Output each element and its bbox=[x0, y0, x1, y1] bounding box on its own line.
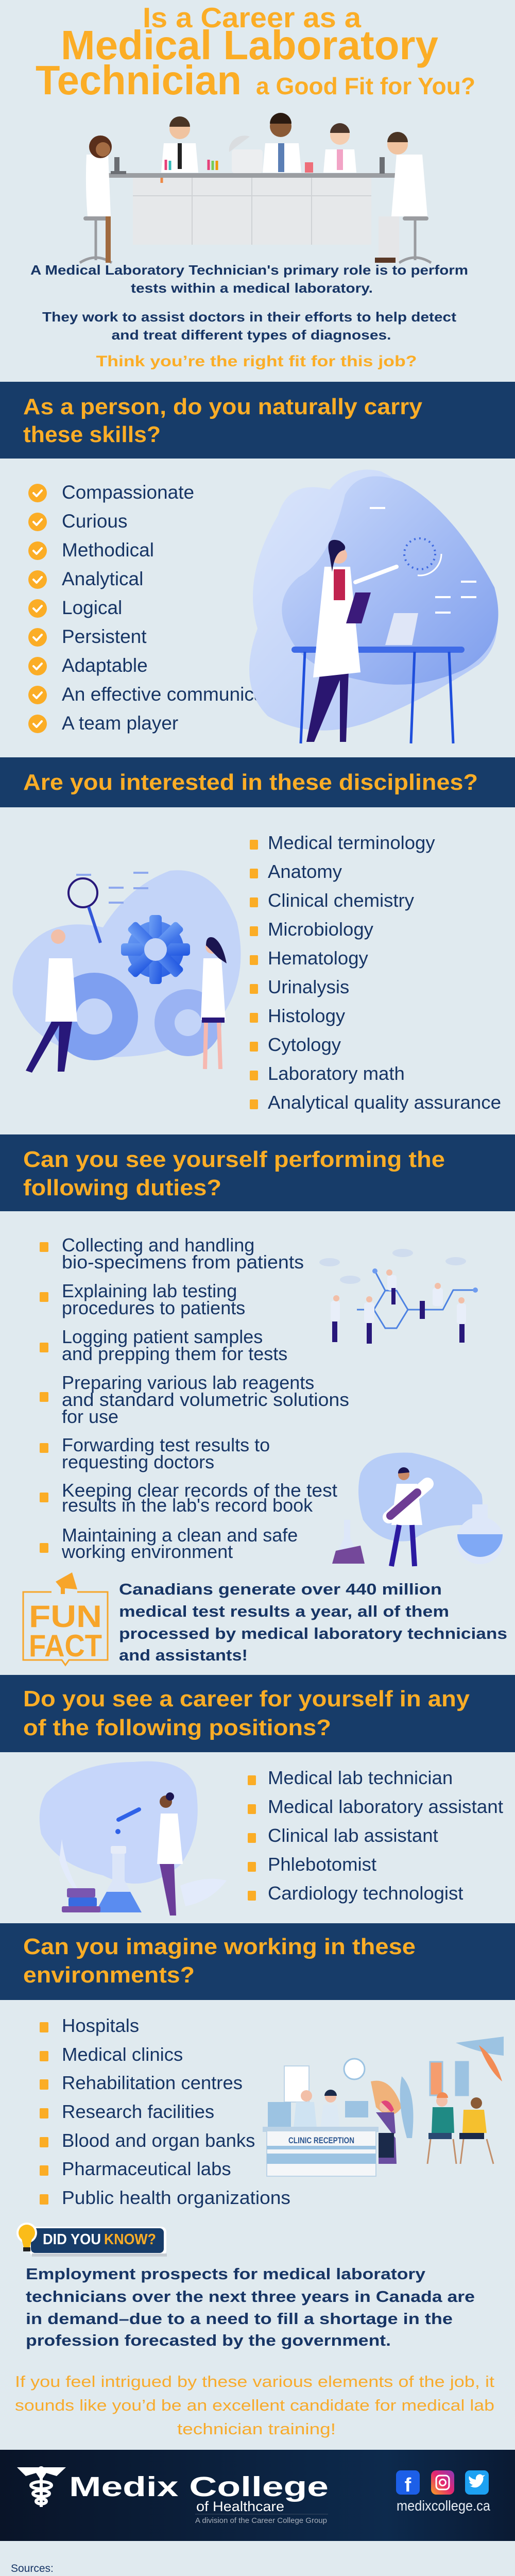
icon: facebook bbox=[396, 2470, 420, 2496]
skills list: Curious bbox=[62, 511, 128, 532]
footer: Medix College bbox=[69, 2471, 329, 2502]
heading bar: environments: environments? bbox=[23, 1962, 195, 1988]
disciplines list: Hematology bbox=[268, 947, 369, 969]
skills list: A team player bbox=[62, 713, 178, 734]
duties list: for use bbox=[62, 1406, 118, 1427]
duties list: bio-specimens from patients bbox=[62, 1251, 304, 1273]
disciplines list: Histology bbox=[268, 1005, 346, 1026]
title: a Good Fit for You? bbox=[256, 73, 475, 99]
fun fact callout: processed by medical laboratory technicians bbox=[119, 1624, 507, 1642]
positions list bbox=[248, 1767, 503, 1904]
disciplines list: Anatomy bbox=[268, 861, 342, 882]
footer bbox=[0, 2450, 515, 2541]
sources: Sources: bbox=[11, 2563, 54, 2574]
skills list: Analytical bbox=[62, 568, 143, 589]
employment text block: Employment prospects for medical laboratory bbox=[26, 2265, 426, 2283]
illustration: gears and scientists bbox=[12, 870, 241, 1073]
icon: fun fact badge bbox=[23, 1572, 108, 1665]
disciplines list: Clinical chemistry bbox=[268, 890, 415, 911]
duties list: and standard volumetric solutions bbox=[62, 1389, 349, 1410]
positions list: Cardiology technologist bbox=[268, 1883, 463, 1904]
title: Medical Laboratory bbox=[61, 22, 439, 68]
duties list: and prepping them for tests bbox=[62, 1343, 287, 1364]
positions list: Medical lab technician bbox=[268, 1767, 453, 1788]
intro paragraph: They work to assist doctors in their efforts to help detect bbox=[42, 309, 456, 325]
positions list: Medical laboratory assistant bbox=[268, 1796, 503, 1817]
heading bar: environments bbox=[0, 1923, 515, 2000]
did you know badge bbox=[16, 2223, 167, 2257]
did you know badge: KNOW? bbox=[104, 2231, 156, 2248]
heading bar: skills: these skills? bbox=[23, 422, 161, 447]
skills list: Persistent bbox=[62, 626, 147, 647]
heading bar: duties: following duties? bbox=[23, 1175, 221, 1200]
heading bar: positions bbox=[0, 1675, 515, 1752]
icon: facebook: f bbox=[405, 2475, 411, 2496]
heading bar: skills bbox=[0, 382, 515, 459]
footer: A division of the Career College Group bbox=[195, 2516, 327, 2525]
did you know badge: DID YOU bbox=[43, 2231, 101, 2248]
environments list: Medical clinics bbox=[62, 2044, 183, 2065]
disciplines list: Cytology bbox=[268, 1034, 341, 1055]
duties list: Logging patient samples bbox=[62, 1326, 263, 1347]
disciplines list: Analytical quality assurance bbox=[268, 1092, 501, 1113]
intro paragraph: A Medical Laboratory Technician's primary role is to perform bbox=[30, 262, 468, 278]
heading bar: duties bbox=[0, 1134, 515, 1211]
duties list: Keeping clear records of the test bbox=[62, 1480, 337, 1501]
heading bar: skills: As a person, do you naturally carry bbox=[23, 394, 423, 419]
environments list: Blood and organ banks bbox=[62, 2130, 255, 2151]
disciplines list bbox=[250, 832, 501, 1113]
closing call to action: If you feel intrigued by these various elements of the job, it bbox=[15, 2372, 494, 2391]
intro paragraph: and treat different types of diagnoses. bbox=[111, 327, 391, 343]
duties list: requesting doctors bbox=[62, 1451, 214, 1472]
disciplines list: Medical terminology bbox=[268, 832, 435, 853]
duties list: Forwarding test results to bbox=[62, 1434, 270, 1455]
heading bar: disciplines: Are you interested in these disciplines? bbox=[23, 770, 478, 795]
icon: caduceus logo bbox=[17, 2466, 66, 2507]
title bbox=[36, 2, 475, 103]
illustration: scientist with test tube bbox=[332, 1453, 504, 1566]
illustration: clinic reception bbox=[263, 2037, 504, 2176]
duties list: Explaining lab testing bbox=[62, 1280, 237, 1301]
closing call to action: technician training! bbox=[177, 2420, 336, 2438]
environments list: Hospitals bbox=[62, 2015, 139, 2036]
employment text block: technicians over the next three years in Canada are bbox=[26, 2287, 475, 2306]
skills list: An effective communicator bbox=[62, 684, 287, 705]
disciplines list: Microbiology bbox=[268, 919, 374, 940]
employment text block: profession forecasted by the government. bbox=[26, 2331, 391, 2349]
environments list: Research facilities bbox=[62, 2101, 214, 2122]
duties list bbox=[40, 1234, 349, 1562]
illustration: lab technicians at bench bbox=[80, 113, 431, 263]
footer: medixcollege.ca bbox=[397, 2498, 490, 2514]
icon: light bulb bbox=[16, 2223, 37, 2251]
fun fact callout: medical test results a year, all of them bbox=[119, 1602, 449, 1620]
duties list: Maintaining a clean and safe bbox=[62, 1524, 298, 1546]
heading bar: positions: Do you see a career for yourself in any bbox=[23, 1686, 470, 1711]
skills list bbox=[28, 482, 287, 734]
environments list: Public health organizations bbox=[62, 2187, 290, 2208]
intro paragraph: tests within a medical laboratory. bbox=[131, 280, 373, 296]
skills list: Adaptable bbox=[62, 655, 148, 676]
skills list: Logical bbox=[62, 597, 122, 618]
illustration: scientist with flask bbox=[40, 1761, 227, 1916]
duties list: working environment bbox=[61, 1541, 233, 1562]
icon: instagram bbox=[431, 2470, 454, 2495]
intro paragraph bbox=[30, 262, 468, 343]
footer: of Healthcare bbox=[196, 2499, 284, 2514]
environments list: Rehabilitation centres bbox=[62, 2072, 243, 2093]
duties list: procedures to patients bbox=[62, 1297, 245, 1318]
duties list: Preparing various lab reagents bbox=[62, 1372, 314, 1393]
title: Technician bbox=[36, 57, 242, 103]
icon: fun fact badge: FACT bbox=[29, 1629, 102, 1663]
title: Is a Career as a bbox=[143, 2, 361, 33]
heading bar: positions: of the following positions? bbox=[23, 1715, 331, 1740]
disciplines list: Urinalysis bbox=[268, 976, 349, 997]
icon: twitter bbox=[465, 2470, 489, 2495]
heading bar: disciplines bbox=[0, 757, 515, 807]
closing call to action bbox=[15, 2372, 494, 2438]
positions list: Phlebotomist bbox=[268, 1854, 376, 1875]
fun fact callout: and assistants! bbox=[119, 1646, 248, 1664]
heading bar: duties: Can you see yourself performing the bbox=[23, 1147, 445, 1172]
skills list: Methodical bbox=[62, 539, 154, 561]
environments list bbox=[40, 2015, 290, 2208]
fun fact callout: Canadians generate over 440 million bbox=[119, 1580, 442, 1598]
illustration: clinic reception: CLINIC RECEPTION bbox=[288, 2136, 354, 2145]
environments list: Pharmaceutical labs bbox=[62, 2158, 231, 2179]
employment text block: in demand–due to a need to fill a shortage in the bbox=[26, 2310, 453, 2328]
fun fact callout bbox=[23, 1572, 507, 1665]
illustration: molecule team bbox=[319, 1249, 478, 1344]
icon: fun fact badge: FUN bbox=[29, 1599, 102, 1634]
illustration: scientist with data bbox=[249, 470, 499, 743]
duties list: results in the lab's record book bbox=[62, 1495, 313, 1516]
closing call to action: sounds like you’d be an excellent candidate for medical lab bbox=[15, 2396, 494, 2414]
disciplines list: Laboratory math bbox=[268, 1063, 405, 1084]
heading bar: environments: Can you imagine working in these bbox=[23, 1934, 416, 1959]
duties list: Collecting and handling bbox=[62, 1234, 254, 1256]
employment text block bbox=[26, 2265, 475, 2349]
positions list: Clinical lab assistant bbox=[268, 1825, 438, 1846]
skills list: Compassionate bbox=[62, 482, 194, 503]
question: Think you’re the right fit for this job? bbox=[96, 353, 417, 370]
